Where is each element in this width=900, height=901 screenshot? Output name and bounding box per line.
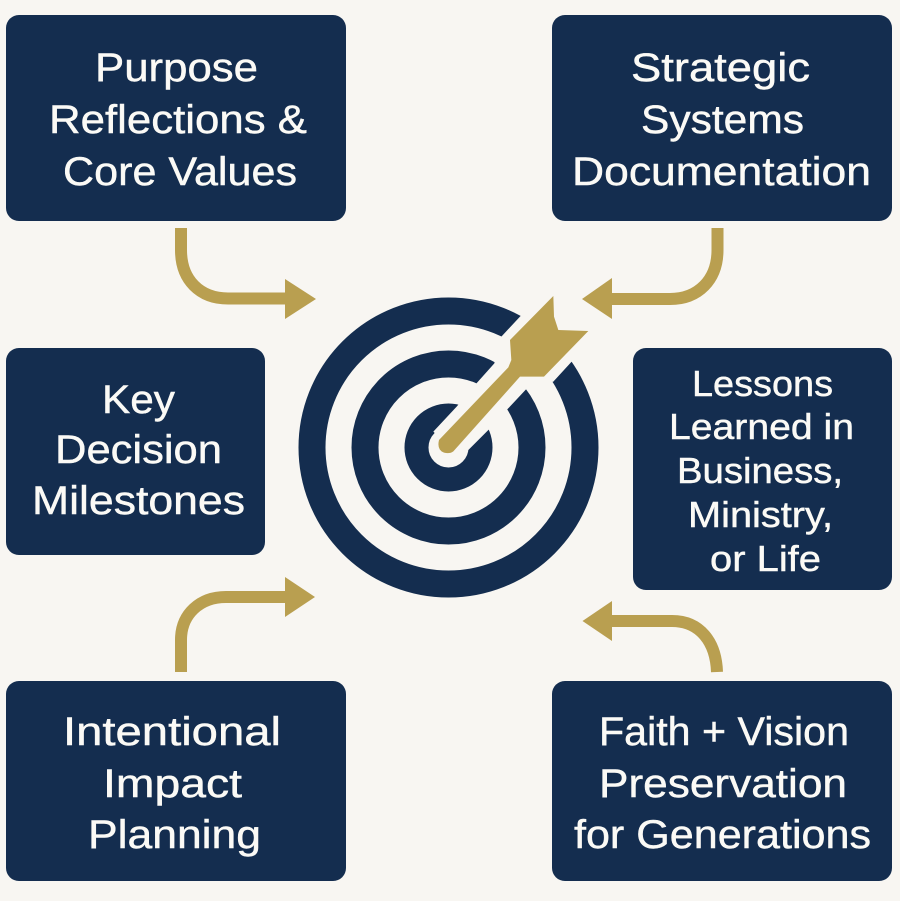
panel: lessons learned in business, ministry, or life: Ministry, — [688, 494, 833, 535]
panel: intentional impact planning: Impact — [103, 762, 242, 806]
panel: strategic systems documentation — [552, 15, 892, 221]
arrow: bottom left to target — [181, 577, 315, 672]
panel: purpose reflections and core values: Core Values — [63, 150, 297, 194]
panel: key decision milestones: Key — [102, 378, 175, 422]
panel: lessons learned in business, ministry, or life: or Life — [710, 538, 821, 579]
panel: faith and vision preservation for generations — [552, 681, 892, 881]
panel: key decision milestones: Decision — [55, 428, 222, 472]
panel: intentional impact planning: Planning — [88, 813, 261, 857]
panel: lessons learned in business, ministry, or life: Lessons — [692, 363, 833, 404]
panel: strategic systems documentation: Systems — [641, 98, 804, 142]
panel: intentional impact planning — [6, 681, 346, 881]
panel: strategic systems documentation: Documentation — [572, 150, 871, 194]
panel: lessons learned in business, ministry, or life: Learned in — [669, 406, 854, 447]
panel: purpose reflections and core values: Purpose — [95, 46, 258, 90]
panel: faith and vision preservation for generations: Faith + Vision — [599, 710, 849, 754]
panel: lessons learned in business, ministry, or life — [633, 348, 892, 590]
panel: strategic systems documentation: Strategic — [631, 46, 810, 90]
panel: key decision milestones — [6, 348, 265, 555]
arrow: top left to target — [181, 228, 316, 319]
panel: faith and vision preservation for generations: for Generations — [574, 813, 871, 857]
panel: key decision milestones: Milestones — [32, 479, 245, 523]
panel: purpose reflections and core values — [6, 15, 346, 221]
icon: target with arrow — [312, 293, 590, 584]
target rings — [312, 311, 585, 584]
arrow: bottom right to target — [582, 601, 717, 672]
panel: faith and vision preservation for generations: Preservation — [599, 762, 847, 806]
panel: lessons learned in business, ministry, or life: Business, — [677, 450, 843, 491]
panel: purpose reflections and core values: Reflections & — [49, 98, 307, 142]
arrow into bullseye — [438, 296, 588, 453]
arrow: top right to target — [582, 228, 718, 319]
panel: intentional impact planning: Intentional — [63, 710, 281, 754]
